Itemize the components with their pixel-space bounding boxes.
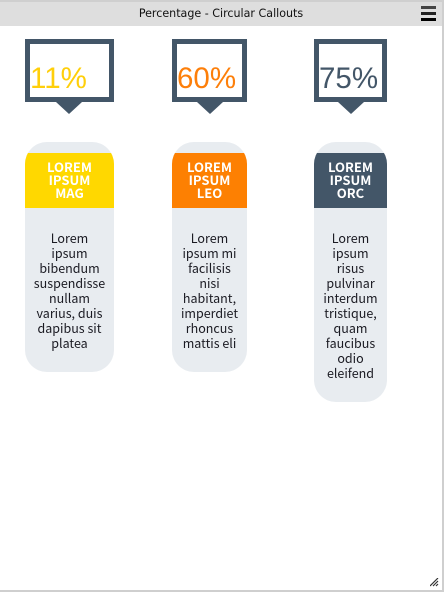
title: Percentage - Circular Callouts bbox=[139, 7, 303, 20]
heading: mag: LOREM bbox=[47, 157, 92, 176]
text: mag: bibendum bbox=[39, 258, 100, 277]
heading: orc: LOREM bbox=[328, 157, 373, 176]
text: orc: risus bbox=[337, 258, 364, 277]
callout: 11%: 11% bbox=[30, 62, 87, 95]
text: leo: ipsum mi bbox=[182, 243, 236, 262]
text: leo bbox=[181, 228, 238, 352]
heading: orc: ORC bbox=[337, 183, 364, 202]
callout: 75%: 75% bbox=[319, 62, 378, 95]
text: orc: tristique, bbox=[324, 303, 377, 322]
text: orc: quam bbox=[334, 318, 367, 337]
text: leo: facilisis bbox=[188, 258, 231, 277]
text: leo: habitant, bbox=[183, 288, 236, 307]
heading: mag: MAG bbox=[55, 183, 84, 202]
panel: Lorem Ipsum Leo bbox=[172, 142, 247, 372]
heading: leo: LOREM bbox=[187, 157, 232, 176]
text: mag bbox=[34, 228, 105, 352]
text: mag: suspendisse bbox=[34, 273, 105, 292]
text: orc: Lorem bbox=[332, 228, 369, 247]
callout: 75% bbox=[314, 39, 387, 114]
heading: orc: IPSUM bbox=[330, 170, 371, 189]
heading: mag: IPSUM bbox=[49, 170, 90, 189]
heading: leo bbox=[172, 153, 247, 208]
text: mag: nullam bbox=[49, 288, 90, 307]
text: orc: pulvinar bbox=[326, 273, 375, 292]
panel: Lorem Ipsum Mag bbox=[25, 142, 114, 372]
text: mag: ipsum bbox=[51, 243, 88, 262]
text: leo: nisi bbox=[199, 273, 220, 292]
text: mag: dapibus sit bbox=[38, 318, 101, 337]
heading: leo: IPSUM bbox=[189, 170, 230, 189]
text: orc: faucibus bbox=[326, 333, 375, 352]
text: leo: imperdiet bbox=[181, 303, 238, 322]
heading: orc bbox=[314, 153, 387, 208]
text: orc: ipsum bbox=[332, 243, 369, 262]
icon: menu bbox=[421, 6, 436, 21]
text: orc: odio bbox=[337, 348, 364, 367]
text: orc: eleifend bbox=[327, 363, 374, 382]
text: mag: platea bbox=[51, 333, 88, 352]
panel: Lorem Ipsum Orc bbox=[314, 142, 387, 402]
text: leo: Lorem bbox=[191, 228, 228, 247]
text: mag: varius, duis bbox=[37, 303, 102, 322]
heading: mag bbox=[25, 153, 114, 208]
text: orc bbox=[323, 228, 378, 382]
callout: 60% bbox=[172, 39, 247, 114]
title bar bbox=[0, 2, 442, 26]
callout: 60%: 60% bbox=[177, 62, 236, 95]
callout: 11% bbox=[25, 39, 114, 114]
text: orc: interdum bbox=[323, 288, 378, 307]
text: leo: mattis eli bbox=[183, 333, 236, 352]
icon: resize handle bbox=[430, 578, 438, 586]
heading: leo: LEO bbox=[197, 183, 222, 202]
text: leo: rhoncus bbox=[186, 318, 233, 337]
text: mag: Lorem bbox=[51, 228, 88, 247]
